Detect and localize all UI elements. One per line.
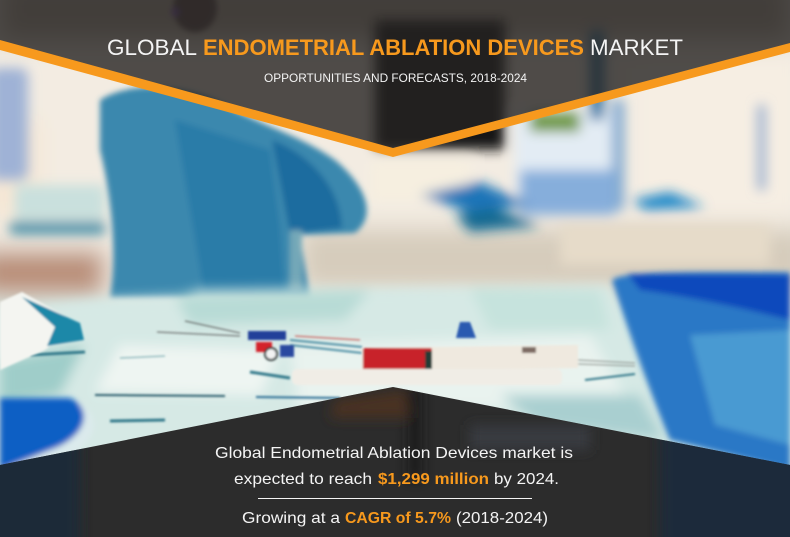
market statement: by 2024. [494, 471, 559, 488]
orange chevron band [0, 40, 790, 157]
divider [258, 498, 532, 499]
CAGR statement: CAGR of 5.7% [345, 510, 451, 527]
market statement: expected to reach [234, 471, 372, 488]
title: MARKET [590, 35, 683, 60]
monitor and equipment [0, 20, 770, 265]
title: GLOBAL [107, 35, 197, 60]
top dark overlay [0, 0, 790, 150]
title [107, 35, 683, 60]
market statement [215, 445, 573, 488]
blue basin left [0, 398, 94, 470]
blue basin right [612, 272, 790, 470]
subtitle: OPPORTUNITIES AND FORECASTS, 2018-2024 [264, 71, 527, 85]
white package with teal tape [0, 292, 84, 370]
surgeon in blue gown [100, 87, 367, 298]
surgeon head [171, 0, 217, 32]
CAGR statement: Growing at a [242, 510, 340, 527]
bottom dark overlay [0, 387, 790, 537]
dark drape creases [30, 352, 635, 421]
market statement: Global Endometrial Ablation Devices market is [215, 445, 573, 462]
syringe [292, 345, 635, 385]
CAGR statement [242, 510, 548, 527]
catheter device [157, 321, 476, 360]
room backdrop [0, 0, 790, 300]
bottom overlay photo tints [0, 385, 790, 537]
sterile drape on table [0, 280, 664, 440]
title: ENDOMETRIAL ABLATION DEVICES [203, 35, 584, 60]
market statement: $1,299 million [378, 471, 489, 488]
CAGR statement: (2018-2024) [456, 510, 548, 527]
